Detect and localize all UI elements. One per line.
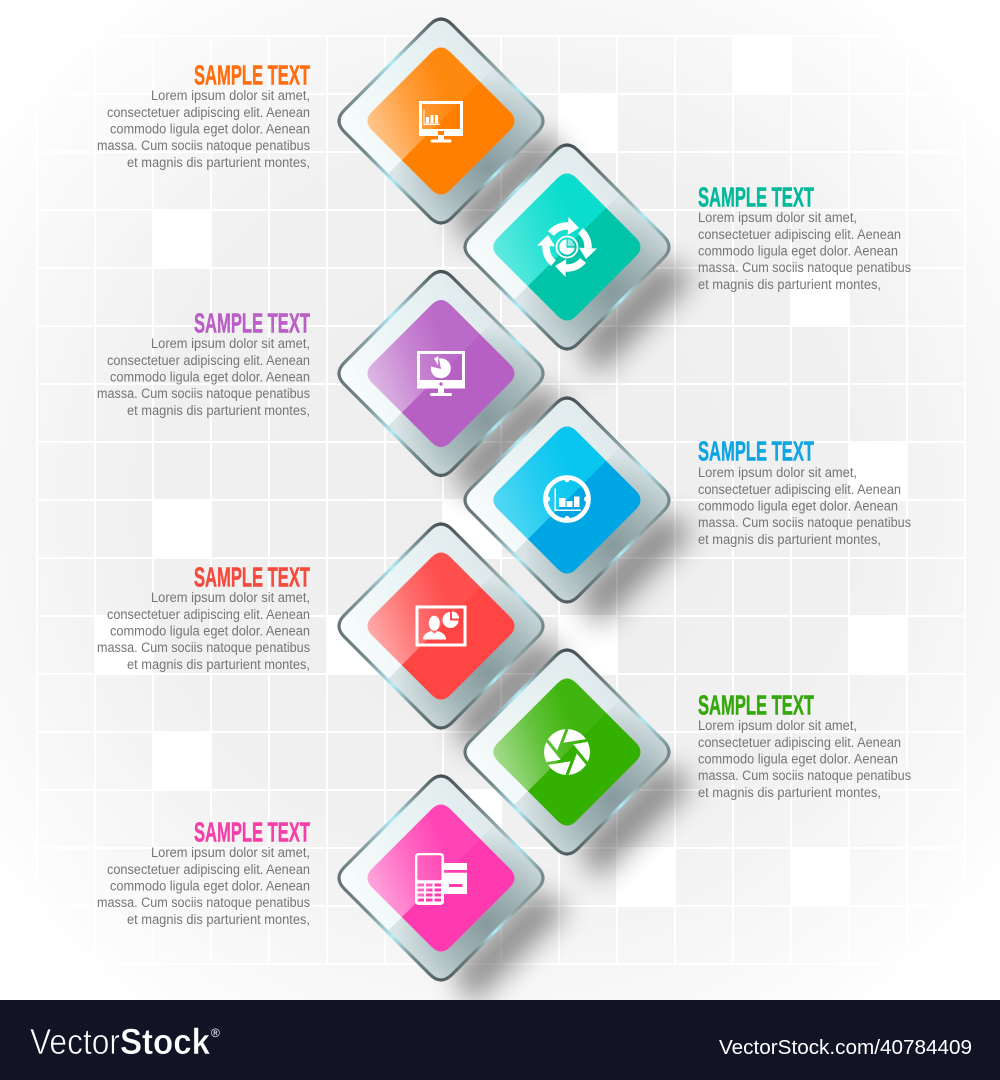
step 2: teal diamond [465, 145, 695, 375]
text block: step 4: consectetuer adipiscing elit. Aenean [698, 482, 901, 497]
text block: step 5: commodo ligula eget dolor. Aenean [110, 624, 310, 638]
text block: step 6: SAMPLE TEXT [698, 690, 814, 720]
text block: step 7: consectetuer adipiscing elit. Aenean [107, 862, 310, 877]
icon: chart in target ring [545, 477, 589, 521]
text block: step 6: Lorem ipsum dolor sit amet, [698, 718, 857, 733]
text block: step 3: consectetuer adipiscing elit. Aenean [107, 353, 310, 368]
text block: step 2 [698, 182, 911, 292]
text block: step 1: et magnis dis parturient montes, [127, 155, 310, 170]
text block: step 6: et magnis dis parturient montes, [698, 785, 881, 800]
footer logo [30, 1021, 220, 1062]
text block: step 4 [698, 436, 911, 547]
icon: monitor with pie chart [417, 351, 465, 396]
footer logo: Vector [30, 1021, 120, 1062]
text block: step 1: massa. Cum sociis natoque penatibus [97, 138, 310, 153]
footer url: VectorStock.com/40784409 [719, 1037, 972, 1059]
text block: step 5: Lorem ipsum dolor sit amet, [151, 590, 310, 605]
icon: camera aperture [544, 729, 590, 775]
text block: step 5 [97, 562, 310, 672]
background grid [37, 36, 965, 964]
text block: step 2: SAMPLE TEXT [698, 182, 814, 212]
text block: step 4: commodo ligula eget dolor. Aenean [698, 498, 898, 514]
text block: step 6: consectetuer adipiscing elit. Aenean [698, 735, 901, 750]
text block: step 2: massa. Cum sociis natoque penatibus [698, 260, 911, 275]
footer logo: ® [211, 1026, 220, 1040]
text block: step 3: massa. Cum sociis natoque penatibus [97, 386, 310, 401]
text block: step 1: Lorem ipsum dolor sit amet, [151, 88, 310, 103]
footer logo: Stock [120, 1021, 211, 1062]
step 7: pink diamond [339, 776, 569, 1006]
text block: step 1: consectetuer adipiscing elit. Aenean [107, 105, 310, 120]
text block: step 3: commodo ligula eget dolor. Aenean [110, 370, 310, 384]
footer bar [0, 1000, 1000, 1080]
text block: step 5: massa. Cum sociis natoque penatibus [97, 640, 310, 655]
text block: step 4: SAMPLE TEXT [698, 436, 814, 466]
step 3: purple diamond [339, 272, 569, 502]
step 1: orange diamond [339, 19, 569, 249]
text block: step 3 [97, 308, 310, 418]
text block: step 6 [698, 690, 911, 800]
text block: step 7: et magnis dis parturient montes, [127, 912, 310, 927]
text block: step 3: et magnis dis parturient montes, [127, 403, 310, 418]
text block: step 5: SAMPLE TEXT [194, 562, 310, 592]
text block: step 2: commodo ligula eget dolor. Aenean [698, 244, 898, 258]
text block: step 6: massa. Cum sociis natoque penatibus [698, 768, 911, 783]
text block: step 2: et magnis dis parturient montes, [698, 277, 881, 292]
text block: step 2: Lorem ipsum dolor sit amet, [698, 210, 857, 225]
text block: step 5: consectetuer adipiscing elit. Aenean [107, 607, 310, 622]
text block: step 7: SAMPLE TEXT [194, 816, 310, 848]
text block: step 6: commodo ligula eget dolor. Aenean [698, 752, 898, 766]
text block: step 2: consectetuer adipiscing elit. Aenean [698, 227, 901, 242]
step 5: red diamond [339, 524, 569, 754]
text block: step 4: et magnis dis parturient montes, [698, 532, 881, 547]
text block: step 3: Lorem ipsum dolor sit amet, [151, 336, 310, 351]
text block: step 3: SAMPLE TEXT [194, 308, 310, 338]
text block: step 1 [97, 60, 310, 170]
icon: phone and card [415, 853, 467, 905]
text block: step 1: SAMPLE TEXT [194, 60, 310, 90]
icon: presentation board with person and pie [416, 606, 466, 646]
text block: step 1: commodo ligula eget dolor. Aenean [110, 122, 310, 136]
text block: step 7: massa. Cum sociis natoque penatibus [97, 895, 310, 910]
step 4: blue diamond [465, 398, 695, 628]
step 6: green diamond [465, 650, 695, 880]
text block: step 5: et magnis dis parturient montes, [127, 657, 310, 672]
white tile highlights [95, 36, 907, 906]
icon: cycle arrows around pie [537, 217, 597, 277]
icon: monitor with bar chart [419, 101, 463, 142]
text block: step 4: Lorem ipsum dolor sit amet, [698, 465, 857, 480]
text block: step 7: Lorem ipsum dolor sit amet, [151, 845, 310, 860]
text block: step 7: commodo ligula eget dolor. Aenean [110, 878, 310, 894]
text block: step 7 [97, 816, 310, 927]
text block: step 4: massa. Cum sociis natoque penatibus [698, 515, 911, 530]
